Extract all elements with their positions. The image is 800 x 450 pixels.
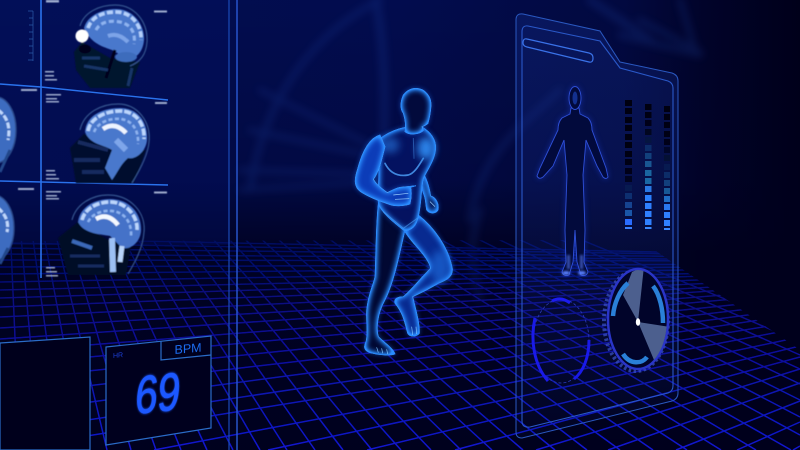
heart rate panel	[106, 336, 211, 445]
level bars column 1	[625, 100, 632, 229]
folder panel	[516, 14, 678, 438]
dna helix glow rays	[240, 0, 700, 300]
panel: MRI scans wall	[0, 0, 237, 450]
feet glow	[562, 255, 586, 275]
dial arcs	[613, 283, 663, 362]
partial MRI scan left 2	[0, 195, 14, 264]
partial MRI scan left 1	[0, 97, 16, 172]
head	[401, 88, 431, 134]
MRI scan 2	[70, 104, 149, 183]
level bars column 2	[645, 104, 652, 229]
heart rate value: 69	[133, 362, 183, 426]
panel frame lines	[0, 0, 237, 450]
label: HR: HR	[113, 352, 123, 360]
MRI scan 3	[58, 195, 144, 275]
near arm	[355, 135, 416, 206]
far arm	[419, 173, 438, 213]
toes detail	[377, 327, 417, 354]
floor grid	[0, 240, 800, 450]
level bars column 3	[664, 106, 670, 230]
scan labels	[18, 0, 167, 276]
chest highlights	[383, 138, 423, 228]
mini human figure	[537, 86, 608, 276]
hand detail	[393, 193, 435, 207]
radial dial	[604, 266, 670, 371]
running human figure	[355, 88, 452, 355]
search pill	[523, 39, 593, 62]
scale ruler	[28, 11, 33, 61]
label: BPM: BPM	[174, 341, 202, 357]
torso	[378, 126, 436, 230]
raised leg	[395, 215, 452, 336]
MRI scan 1	[74, 5, 147, 88]
ring gauge	[533, 299, 589, 383]
dark readout box	[0, 337, 90, 450]
standing leg	[365, 203, 417, 355]
